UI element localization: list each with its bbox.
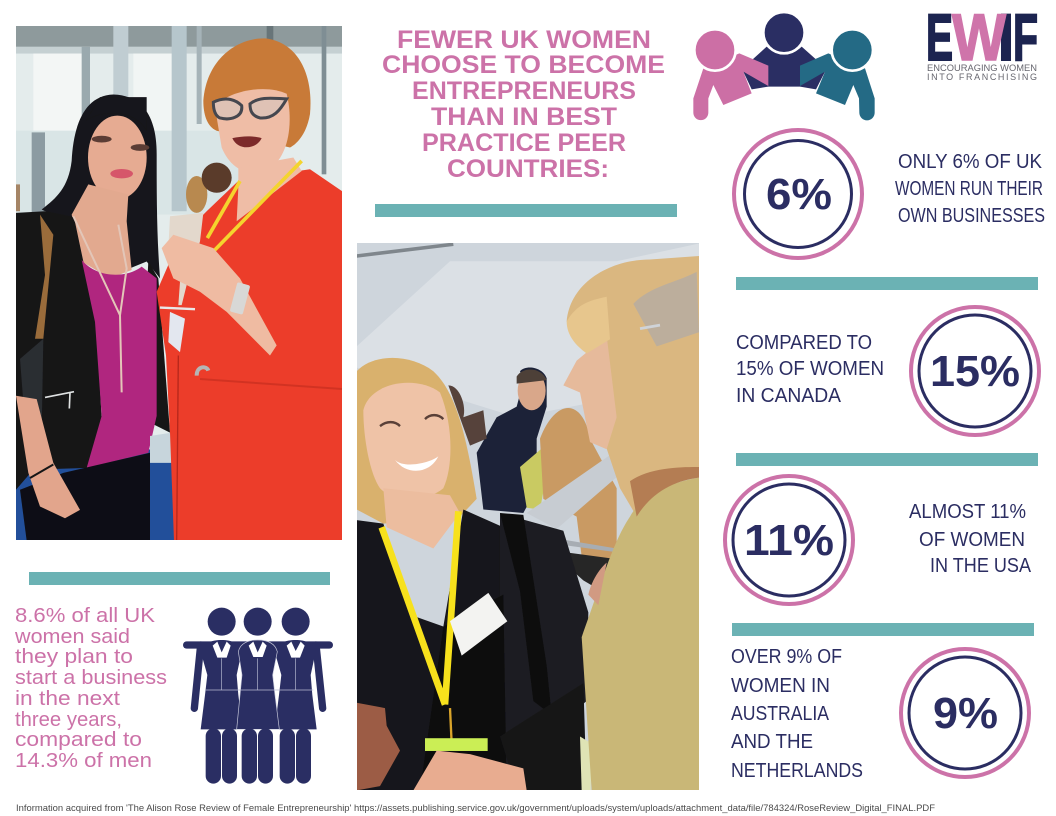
woman left (201, 608, 243, 784)
stat text: 11%: IN THE USA (930, 555, 1032, 577)
title: CHOOSE TO BECOME (382, 51, 665, 79)
photo: two women talking at event (357, 242, 700, 791)
logo: EWIF: INTO FRANCHISING (927, 72, 1037, 82)
text block: 8.6% of UK women: in the next (15, 687, 120, 710)
woman centre (237, 608, 279, 784)
stat text: 9%: NETHERLANDS (731, 760, 863, 782)
text block: 8.6% of UK women (14, 604, 167, 772)
title: THAN IN BEST (431, 103, 617, 131)
stat text: 9%: WOMEN IN (731, 675, 830, 697)
logo: EWIF: F (1013, 0, 1038, 74)
title: COUNTRIES: (447, 155, 609, 183)
stat text: 6%: ONLY 6% OF UK (898, 151, 1043, 173)
text block: 8.6% of UK women: start a business (15, 666, 167, 689)
stat text: 11%: OF WOMEN (919, 529, 1025, 551)
title: ENTREPRENEURS (412, 77, 636, 105)
stat text: 11% (909, 501, 1032, 577)
stat text: 11%: ALMOST 11% (909, 501, 1026, 523)
stat text: 9%: AND THE (731, 731, 813, 753)
text block: 8.6% of UK women: 14.3% of men (15, 749, 152, 772)
left woman (42, 94, 160, 278)
stat: 6% badge: 6% (766, 170, 832, 219)
logo: EWIF: I (998, 0, 1014, 74)
divider bar (736, 277, 1038, 290)
stat: 11% badge (725, 476, 853, 604)
logo: EWIF (926, 0, 1038, 82)
stat text: 9% (731, 646, 863, 782)
stat: 9% badge (901, 649, 1029, 777)
stat: 15% badge: 15% (930, 347, 1020, 396)
title (382, 26, 665, 183)
divider bar above left text (29, 572, 330, 585)
stat text: 15% (736, 332, 884, 407)
stat text: 9%: AUSTRALIA (731, 703, 830, 725)
logo: EWIF: ENCOURAGING WOMEN (927, 63, 1037, 73)
text block: 8.6% of UK women: 8.6% of all UK (15, 604, 155, 627)
stat: 6% badge (734, 130, 862, 258)
title: PRACTICE PEER (422, 129, 626, 157)
text block: 8.6% of UK women: women said (14, 625, 130, 648)
icon: three people with arms round each other (693, 12, 875, 120)
stat: 11% badge: 11% (744, 516, 834, 565)
title: FEWER UK WOMEN (397, 26, 651, 54)
stat: 9% badge: 9% (933, 689, 998, 738)
photo: two women at networking event (13, 23, 347, 543)
right woman (567, 256, 699, 517)
icon: three women in suits (187, 608, 329, 784)
text block: 8.6% of UK women: three years, (15, 708, 122, 731)
right woman (157, 169, 342, 541)
source footnote: Information acquired from 'The Alison Rose Review of Female Entrepreneurship' https://assets.publishing.service.gov.uk/government/uploads/system/uploads/attachment_data/file/784324/RoseReview_Digital_FINAL.PDF (16, 803, 935, 814)
stat text: 15%: 15% OF WOMEN (736, 358, 884, 380)
stat text: 15%: IN CANADA (736, 385, 842, 407)
divider bar (732, 623, 1034, 636)
stat text: 9%: OVER 9% OF (731, 646, 842, 668)
divider bar under title (375, 204, 677, 217)
left woman (357, 358, 477, 524)
stat: 15% badge (911, 307, 1039, 435)
stat text: 15%: COMPARED TO (736, 332, 872, 354)
text block: 8.6% of UK women: compared to (15, 728, 142, 751)
divider bar (736, 453, 1038, 466)
text block: 8.6% of UK women: they plan to (15, 645, 133, 668)
woman right (275, 608, 317, 784)
logo: EWIF: W (952, 0, 1007, 74)
stat text: 6% (895, 151, 1045, 227)
logo: EWIF: E (926, 0, 953, 74)
